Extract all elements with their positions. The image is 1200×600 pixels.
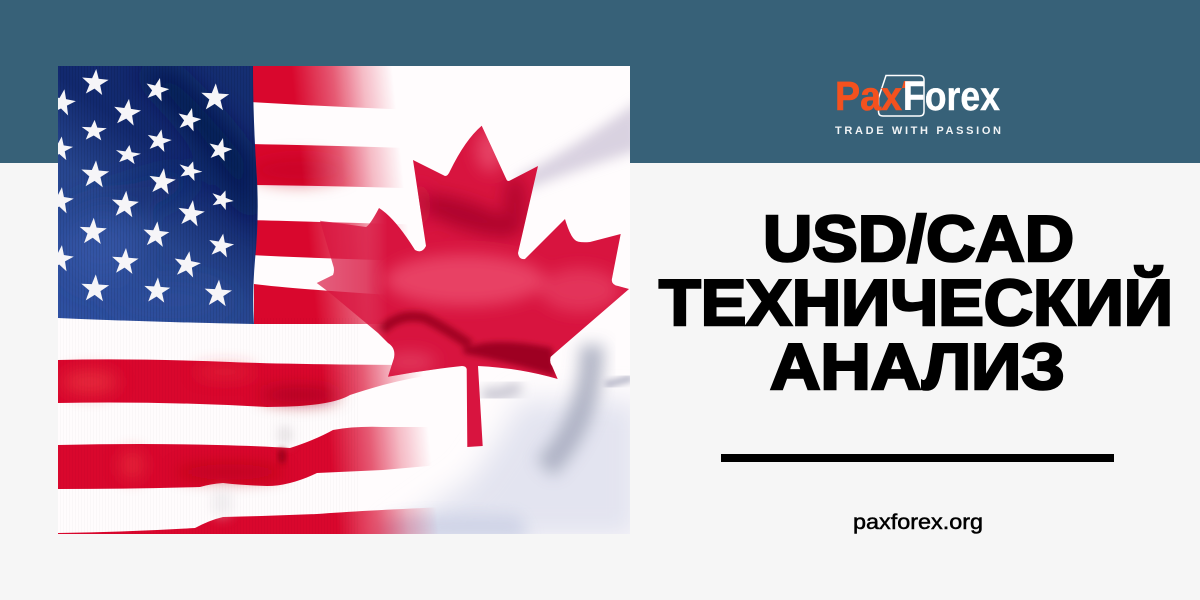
divider rule (721, 454, 1114, 462)
logo orange slash (902, 81, 910, 88)
logo frame (878, 76, 924, 116)
fine cloth weave on stripes (58, 318, 358, 534)
title (659, 202, 1173, 403)
stars (45, 68, 236, 307)
photo: blended US and Canadian flags (45, 66, 640, 540)
stripe crease (278, 448, 286, 464)
white cloth base (58, 66, 630, 534)
icon: Canadian maple leaf (316, 126, 629, 447)
title line 3: АНАЛИЗ (770, 330, 1065, 403)
logo: PaxForex (835, 73, 1001, 137)
logo tagline: TRADE WITH PASSION (835, 125, 1001, 137)
title line 1: USD/CAD (763, 202, 1074, 275)
US canton (45, 66, 258, 326)
stripe highlights (62, 144, 347, 492)
website url: paxforex.org (853, 511, 983, 534)
title line 2: ТЕХНИЧЕСКИЙ (659, 266, 1173, 339)
red stripes fading to white (58, 66, 470, 534)
canton folds (70, 66, 258, 276)
white stripe creases (212, 426, 290, 517)
top band (0, 0, 1200, 163)
logo word: Pax: Pax (835, 73, 902, 119)
cloth shadows on the Canadian side (370, 100, 640, 540)
logo word: Forex: Forex (903, 73, 1000, 119)
